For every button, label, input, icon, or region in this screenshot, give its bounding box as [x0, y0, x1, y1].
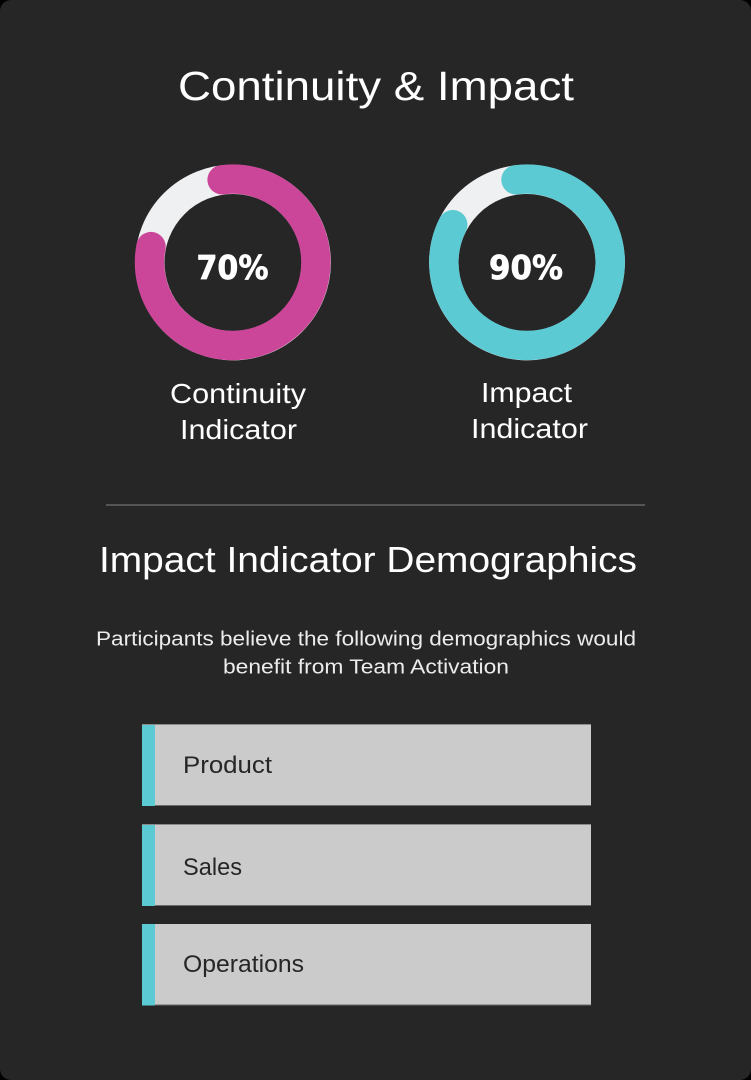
list item: product: Product	[183, 752, 272, 779]
label: continuity indicator: Indicator	[180, 414, 297, 445]
heading: impact indicator demographics: Impact Indicator Demographics	[99, 539, 637, 580]
donut chart: continuity 70%	[150, 179, 316, 346]
label: continuity indicator: Continuity	[170, 378, 306, 409]
list item: operations: Operations	[183, 951, 304, 978]
list item: product	[142, 724, 591, 806]
description text: Participants believe the following demographics would	[96, 628, 636, 650]
label: impact indicator: Indicator	[471, 413, 588, 444]
description text: benefit from Team Activation	[223, 656, 509, 678]
label: continuity indicator	[170, 378, 306, 445]
list item: operations	[142, 924, 591, 1006]
donut chart: continuity 70%: 70%	[196, 248, 268, 287]
label: impact indicator: Impact	[481, 377, 572, 408]
description text	[96, 628, 636, 678]
title: Continuity & Impact	[178, 63, 575, 109]
donut chart: impact 90%	[444, 179, 610, 346]
donut chart: impact 90%: 90%	[489, 248, 563, 287]
label: impact indicator	[471, 377, 588, 444]
list item: sales	[142, 824, 591, 906]
list item: sales: Sales	[183, 854, 242, 881]
